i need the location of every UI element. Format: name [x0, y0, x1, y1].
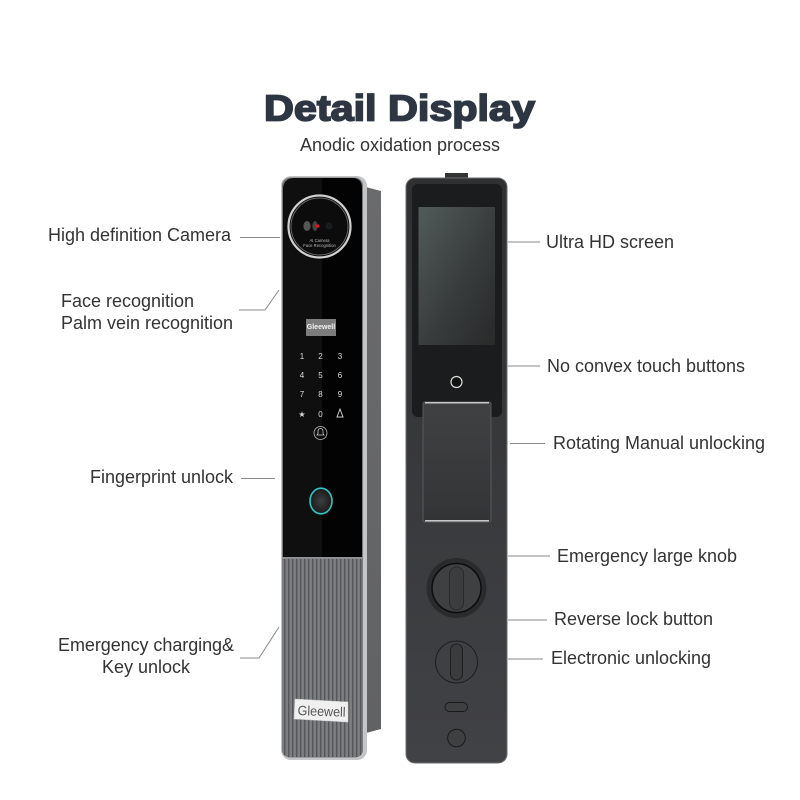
keypad: 7: [300, 390, 305, 399]
camera ring: [288, 196, 350, 258]
back view of smart lock: [406, 173, 507, 763]
front view of smart lock: [281, 176, 381, 760]
front outer frame: [281, 176, 367, 760]
keypad: 2: [318, 352, 323, 361]
keypad: 9: [338, 390, 343, 399]
emergency large knob: [426, 558, 486, 618]
subtitle: Anodic oxidation process: [300, 135, 500, 155]
callout: Emergency large knob: Emergency large knob: [557, 546, 737, 566]
callout: No convex touch buttons: No convex touch buttons: [547, 356, 745, 376]
keypad: ★: [298, 410, 306, 419]
callout: Emergency charging and key unlock: [58, 627, 279, 677]
callout: Emergency charging and key unlock: Key unlock: [102, 657, 191, 677]
fingerprint sensor: [310, 488, 332, 514]
callout: Face and palm vein recognition: Face recognition: [61, 291, 194, 311]
top tab: [445, 173, 468, 179]
upper screen panel: [412, 184, 502, 417]
Gleewell label: [294, 699, 348, 722]
callout: Rotating Manual unlocking: Rotating Manual unlocking: [553, 433, 765, 453]
bottom round button: [448, 729, 465, 747]
callout: Ultra HD screen: Ultra HD screen: [546, 232, 674, 252]
brand badge: Gleewell: [307, 324, 335, 331]
side housing: [362, 186, 381, 733]
title: Detail Display: [264, 88, 536, 128]
back plate: [406, 178, 507, 763]
rotating handle: [423, 402, 491, 522]
keypad: 8: [318, 390, 323, 399]
camera ring: Face Recognition: [303, 243, 336, 248]
ultra HD screen: [418, 207, 495, 345]
Gleewell label: Gleewell: [297, 703, 346, 720]
keypad: 0: [318, 410, 323, 419]
keypad: 5: [318, 371, 323, 380]
callout: Electronic unlocking: Electronic unlocking: [551, 648, 711, 668]
callout: Face and palm vein recognition: [61, 290, 279, 333]
home touch button: [451, 376, 462, 388]
keypad: 1: [300, 352, 305, 361]
keypad: 6: [338, 371, 343, 380]
black glass panel: [283, 178, 362, 557]
callout: Fingerprint unlock: Fingerprint unlock: [90, 467, 234, 487]
callout: Face and palm vein recognition: Palm vein recognition: [61, 313, 233, 333]
callout: Reverse lock button: Reverse lock button: [554, 609, 713, 629]
speaker grille: [282, 557, 363, 757]
callout: Emergency charging and key unlock: Emergency charging&: [58, 635, 234, 655]
brand badge: [306, 319, 336, 336]
keypad: 3: [338, 352, 343, 361]
key slot pill: [445, 702, 468, 712]
keypad: 4: [300, 371, 305, 380]
camera ring: AI Camera: [309, 238, 330, 243]
reverse lock knob: [436, 641, 478, 683]
callout: High definition Camera: High definition Camera: [48, 225, 232, 245]
keypad: [298, 352, 343, 440]
